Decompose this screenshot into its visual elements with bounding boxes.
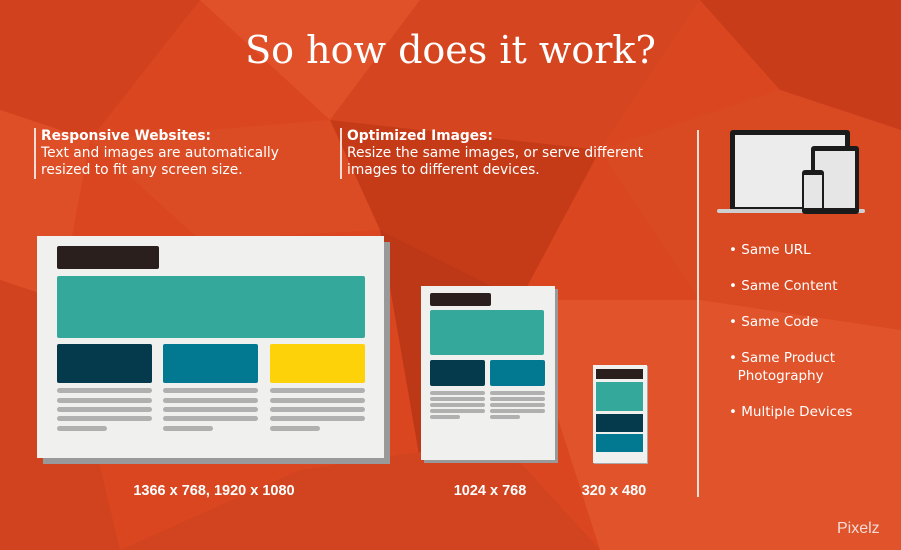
bullet list: Photography xyxy=(738,368,824,384)
text block: optimized images xyxy=(340,128,643,179)
text: 320 x 480 xyxy=(582,483,646,499)
tablet mockup xyxy=(421,286,558,463)
icon: devices xyxy=(717,130,865,214)
text block: optimized images: images to different devices. xyxy=(347,162,540,178)
text block: responsive websites: resized to fit any screen size. xyxy=(41,162,243,178)
text block: responsive websites: Responsive Websites: xyxy=(41,128,211,144)
bullet list xyxy=(729,242,852,420)
text: 1024 x 768 xyxy=(454,483,526,499)
bullet list: • Same Product xyxy=(729,350,835,366)
large desktop mockup xyxy=(37,236,390,464)
phone mockup xyxy=(593,365,648,464)
bullet list: • Same Code xyxy=(729,314,818,330)
bullet list: • Multiple Devices xyxy=(729,404,852,420)
resolution labels: 1366 x 768, 1920 x 1080 xyxy=(133,483,295,499)
bullet list: • Same Content xyxy=(729,278,838,294)
watermark: Pixelz xyxy=(837,520,880,537)
title: So how does it work? xyxy=(245,28,656,72)
bullet list: • Same URL xyxy=(729,242,811,258)
text block: optimized images: Resize the same images, or serve different xyxy=(347,145,643,161)
text block: optimized images: Optimized Images: xyxy=(347,128,493,144)
divider xyxy=(697,130,699,497)
text block: responsive websites: Text and images are automatically xyxy=(41,145,279,161)
text block: responsive websites xyxy=(34,128,279,179)
